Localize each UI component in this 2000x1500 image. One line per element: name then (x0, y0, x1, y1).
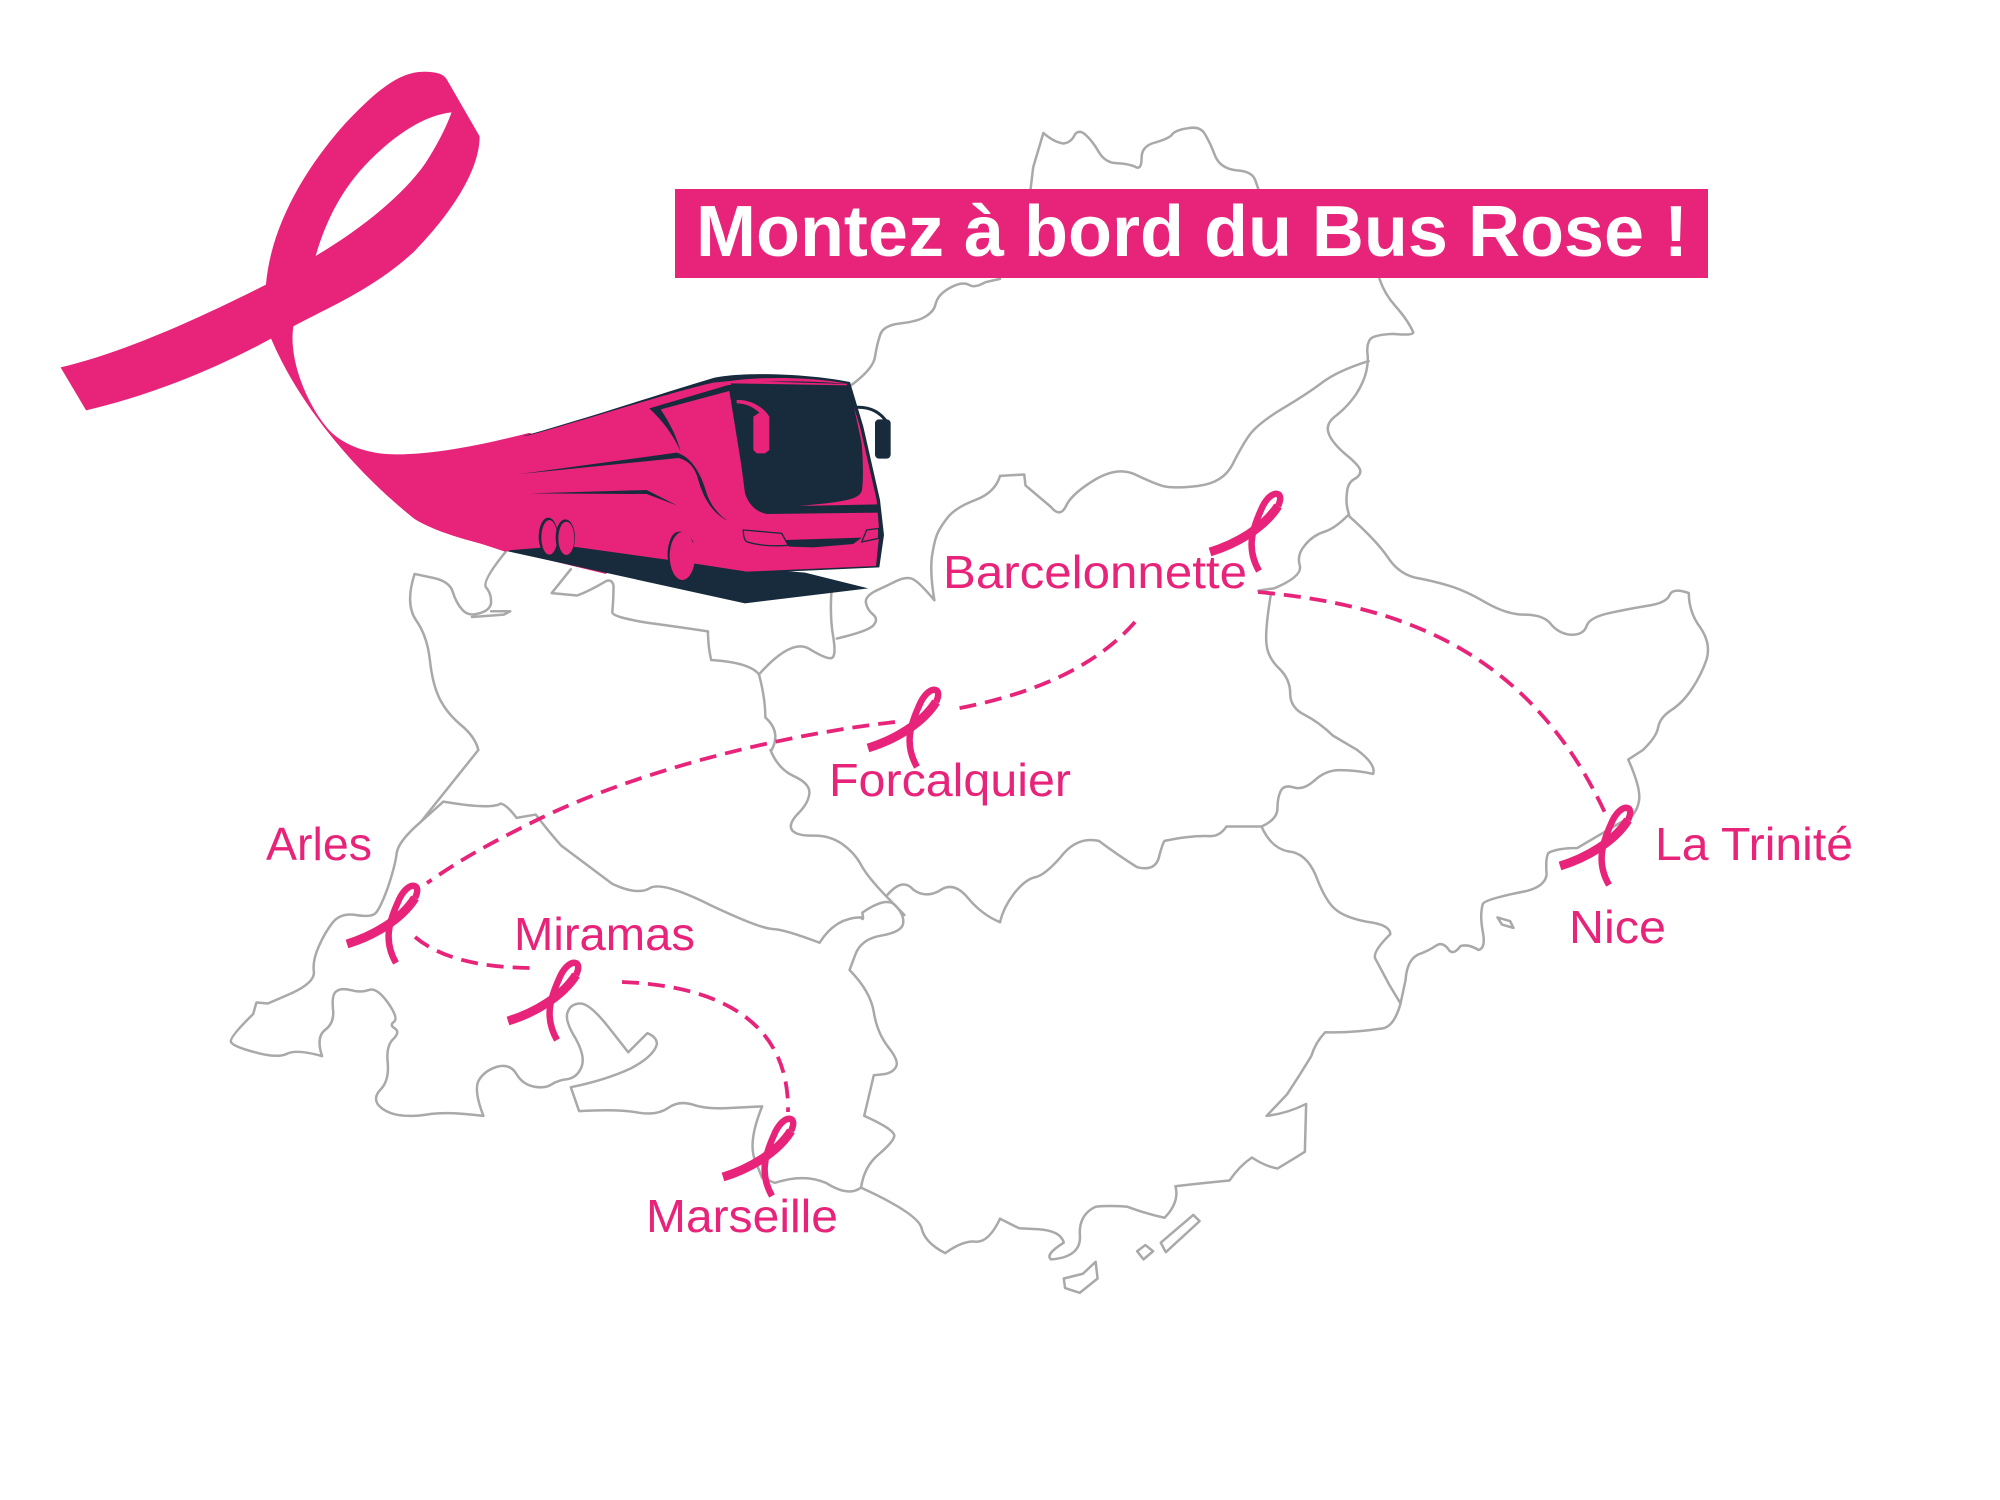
stop: La Trinité and Nice: La Trinité (1655, 818, 1853, 870)
icon: bus (480, 374, 891, 603)
map: south-west borders (231, 750, 1000, 1253)
exterior mirror (856, 407, 891, 459)
stop: Forcalquier: Forcalquier (829, 754, 1071, 806)
interior mirror (737, 400, 769, 453)
stop: Arles: Arles (266, 818, 372, 870)
rear wheels (539, 518, 575, 556)
body line lower (530, 490, 677, 506)
stop: La Trinité and Nice (1560, 808, 1853, 953)
pillar line (728, 385, 743, 473)
bus pink body (480, 381, 879, 572)
map: north-west borders (410, 279, 1000, 750)
stop: Arles (266, 818, 417, 963)
side window frame (649, 385, 731, 452)
front wheel (668, 532, 695, 580)
stop: Barcelonnette: Barcelonnette (943, 546, 1247, 598)
stop: Miramas (508, 908, 695, 1040)
stop: Forcalquier (829, 690, 1071, 806)
bus windscreen (731, 383, 879, 514)
stop: Miramas: Miramas (514, 908, 695, 960)
bus shadow (505, 545, 868, 603)
map: south-east borders and islands (1000, 750, 1643, 1293)
map of the region (231, 128, 1708, 1293)
headlights and bumper (743, 528, 879, 547)
stop: La Trinité and Nice: Nice (1569, 901, 1666, 953)
stop: Barcelonnette (943, 494, 1280, 598)
icon: large pink ribbon turning into bus body (61, 72, 670, 574)
stop: Marseille (646, 1119, 838, 1242)
body line upper (520, 453, 727, 521)
dashed bus route (415, 592, 1606, 1112)
title banner (675, 189, 1708, 278)
map: north-east borders (1000, 128, 1708, 750)
stop: Marseille: Marseille (646, 1190, 838, 1242)
title text: Montez à bord du Bus Rose ! (696, 192, 1688, 272)
roof highlight (733, 378, 848, 384)
bus dark outline (523, 374, 884, 573)
